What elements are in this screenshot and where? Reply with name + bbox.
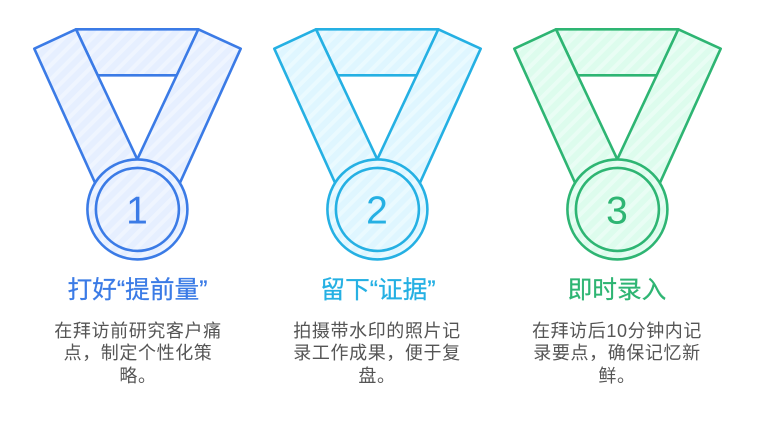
right ribbon 3 xyxy=(617,29,721,183)
heading 3: 即时录入 xyxy=(568,277,666,304)
right ribbon 1 xyxy=(137,29,241,183)
ribbon band 1 xyxy=(76,29,198,75)
medal 2 xyxy=(274,29,481,259)
number 2: 2 xyxy=(366,190,388,232)
number 1: 1 xyxy=(126,190,148,232)
text block 3: 在拜访后10分钟内记 xyxy=(532,321,702,341)
ribbon band 3 xyxy=(556,29,678,75)
number 3: 3 xyxy=(606,190,628,232)
left ribbon 3 xyxy=(514,29,617,183)
text block 1: 在拜访前研究客户痛 xyxy=(54,321,222,341)
text block 3 xyxy=(532,321,702,386)
medal 1 xyxy=(34,29,241,259)
text block 1 xyxy=(54,321,222,386)
heading 2: 留下“证据” xyxy=(320,277,436,304)
right ribbon 2 xyxy=(377,29,481,183)
text block 1: 点，制定个性化策 xyxy=(64,343,212,363)
left ribbon 1 xyxy=(34,29,137,183)
left ribbon 2 xyxy=(274,29,377,183)
medal 3 xyxy=(514,29,721,259)
text block 3: 鲜。 xyxy=(598,366,636,386)
text block 1: 略。 xyxy=(119,366,157,386)
text block 2 xyxy=(293,321,461,386)
text block 3: 录要点，确保记忆新 xyxy=(533,343,701,363)
medal disc 2 xyxy=(327,159,427,259)
text block 2: 录工作成果，便于复 xyxy=(293,343,461,363)
ribbon band 2 xyxy=(316,29,438,75)
medal disc 3 xyxy=(567,159,667,259)
heading 1: 打好“提前量” xyxy=(68,277,207,304)
text block 2: 盘。 xyxy=(358,366,396,386)
text block 2: 拍摄带水印的照片记 xyxy=(293,321,461,341)
medal disc 1 xyxy=(87,159,187,259)
